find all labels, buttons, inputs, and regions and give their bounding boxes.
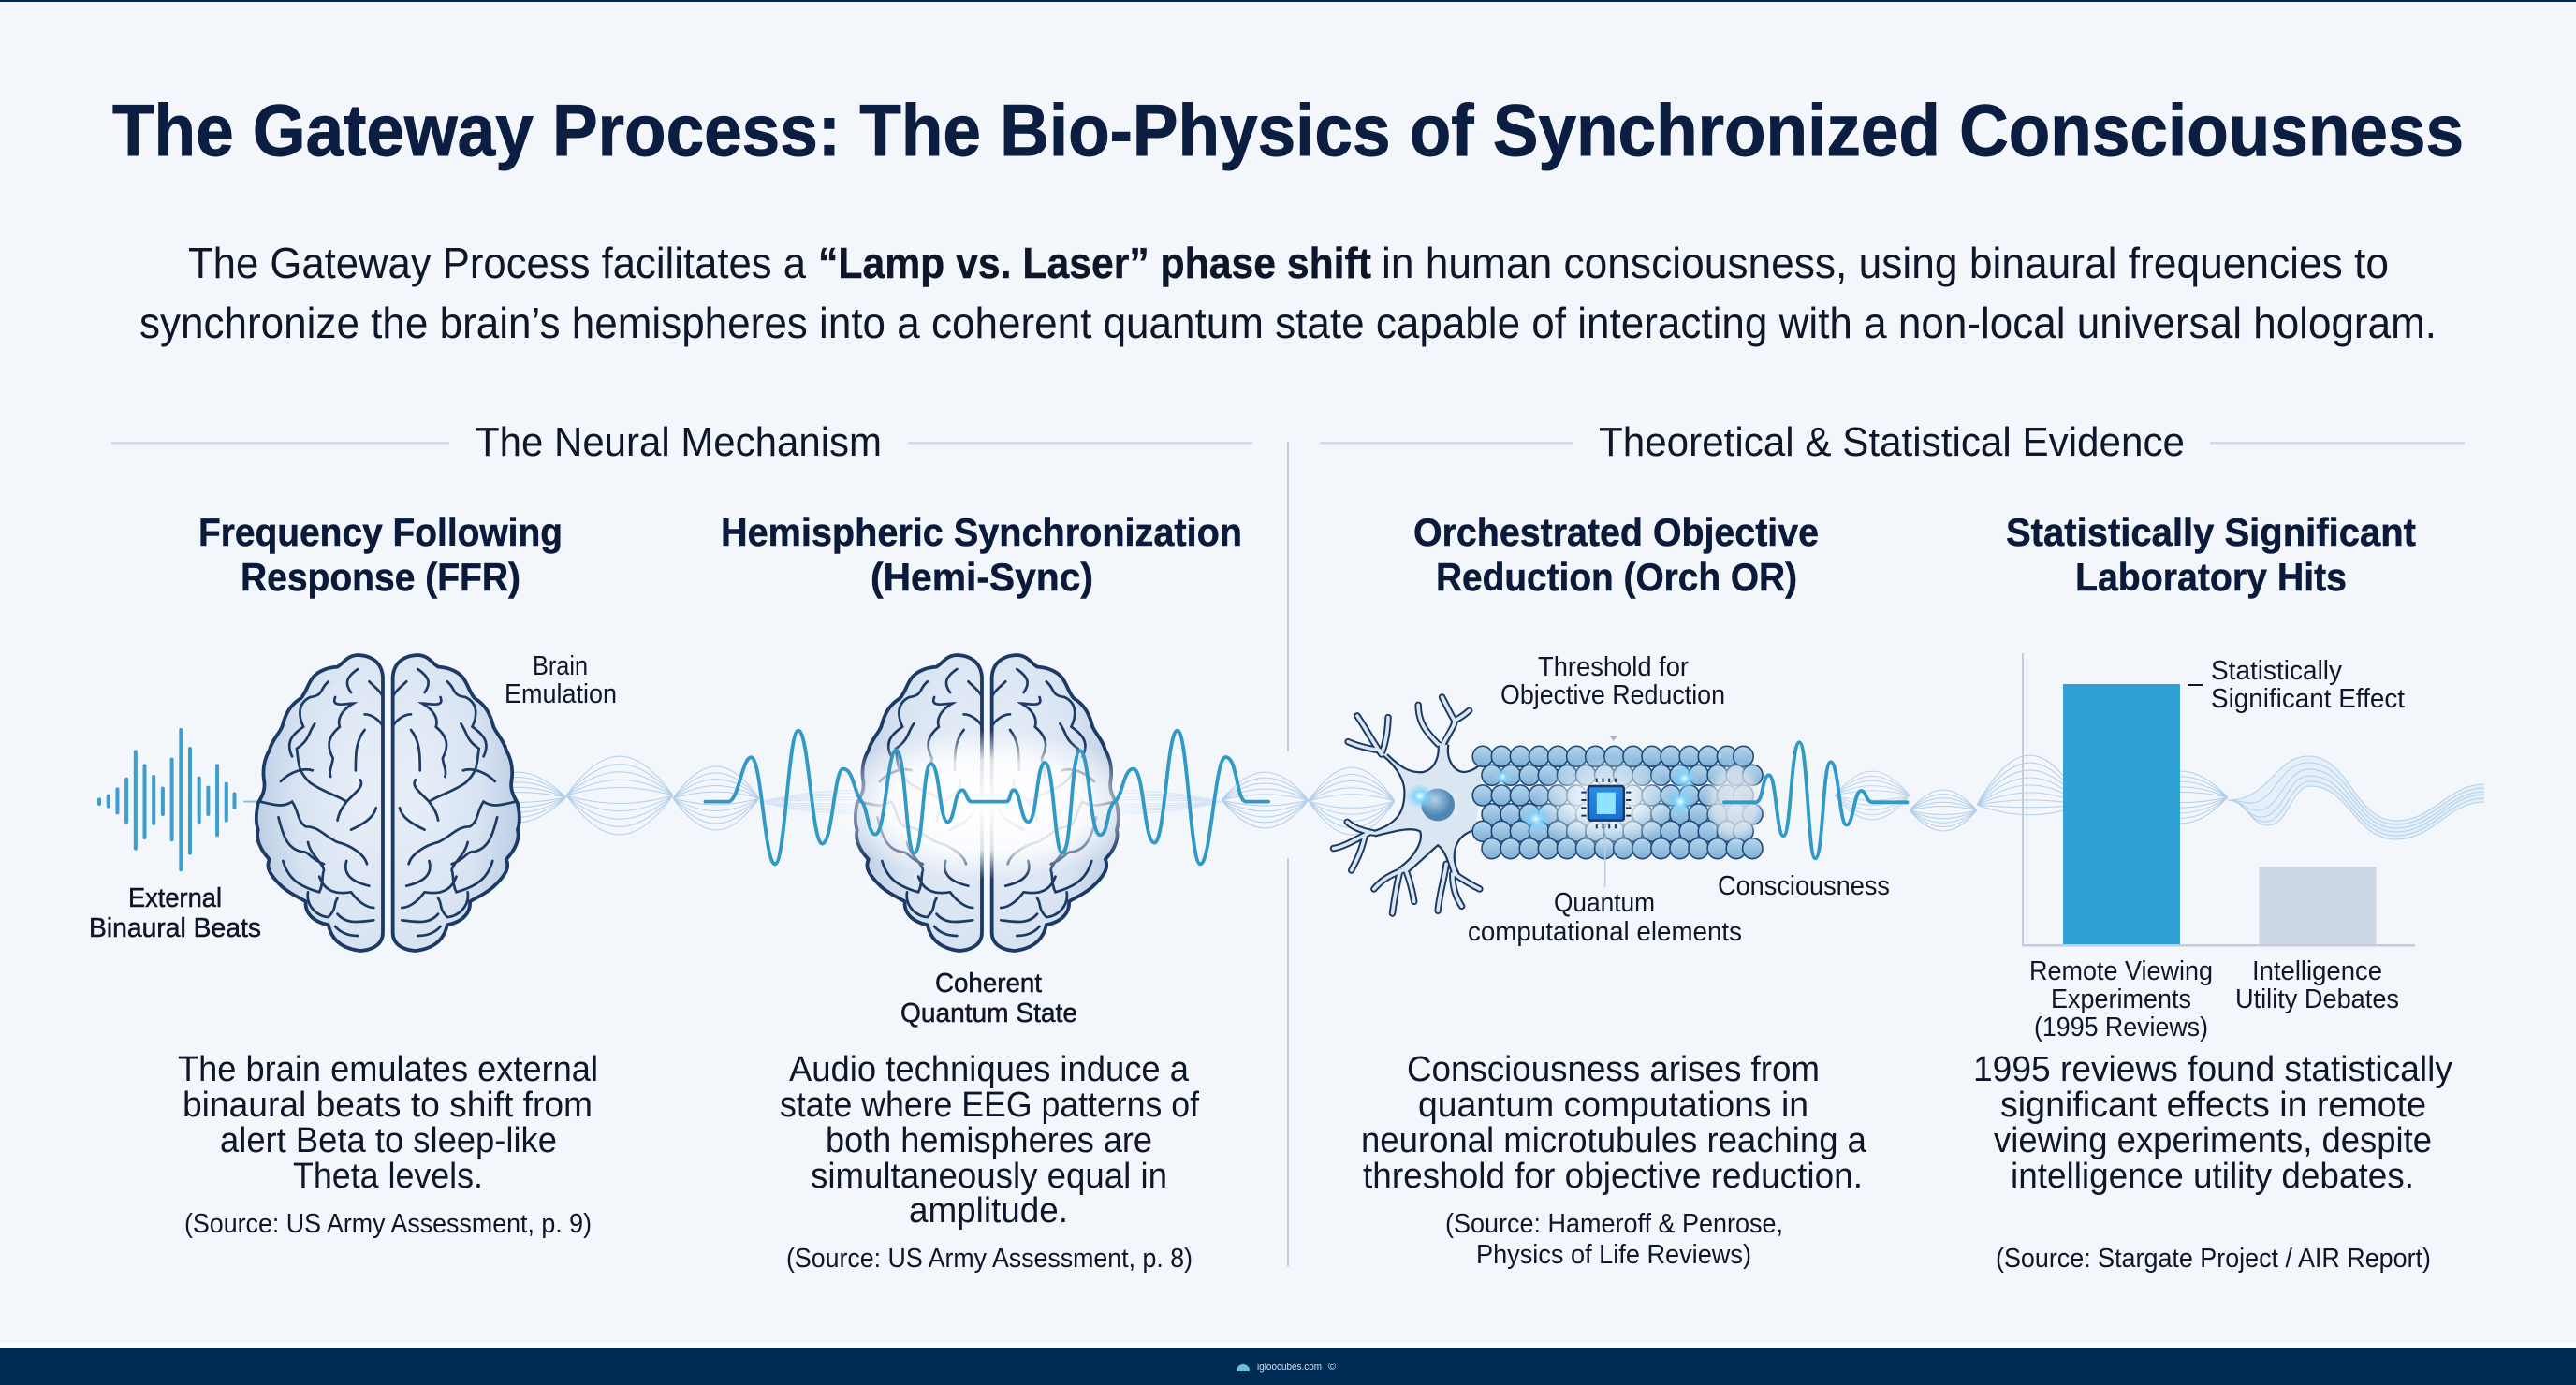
chart: synchronized brainwave bbox=[705, 731, 1268, 864]
callout: Statistically Significant Effect: Significant Effect bbox=[2211, 684, 2405, 714]
section heading: Theoretical and Statistical Evidence: Theoretical & Statistical Evidence bbox=[1599, 419, 2185, 465]
bar: Intelligence Utility Debates bbox=[2260, 867, 2376, 944]
section heading: The Neural Mechanism: The Neural Mechanism bbox=[476, 419, 882, 465]
footer credit: igloocubes.com bbox=[1257, 1362, 1322, 1373]
heading: Laboratory Hits: Laboratory Hits bbox=[2075, 555, 2347, 599]
label: Quantum computational elements: Quantum bbox=[1554, 888, 1655, 918]
panel: Statistically Significant Laboratory Hits bbox=[1973, 510, 2452, 1274]
heading: Hemi-Sync: Hemispheric Synchronization bbox=[721, 510, 1242, 554]
text block: Orch OR description: quantum computations in bbox=[1418, 1086, 1808, 1125]
bar chart bbox=[2022, 653, 2415, 947]
text block: Stargate description: viewing experiments, despite bbox=[1994, 1121, 2432, 1160]
axis label: Remote Viewing Experiments: Experiments bbox=[2051, 984, 2191, 1014]
intro paragraph: “Lamp vs. Laser” phase shift bbox=[818, 239, 1371, 287]
axis label: Remote Viewing Experiments bbox=[2029, 956, 2213, 1042]
heading: Hemi-Sync: (Hemi-Sync) bbox=[871, 555, 1093, 599]
label: Brain Emulation: Emulation bbox=[505, 679, 617, 709]
axis label: Intelligence Utility Debates: Intelligence bbox=[2252, 956, 2382, 986]
axis label: Intelligence Utility Debates: Utility Debates bbox=[2235, 984, 2399, 1014]
icon: brain bbox=[256, 655, 520, 951]
label: External Binaural Beats: External bbox=[128, 883, 222, 913]
label: Coherent Quantum State: Quantum State bbox=[900, 999, 1077, 1028]
intro paragraph: The Gateway Process facilitates a bbox=[188, 239, 806, 287]
callout: Statistically Significant Effect: Statistically bbox=[2211, 656, 2342, 686]
label: Threshold for Objective Reduction: Objective Reduction bbox=[1500, 680, 1725, 710]
label: External Binaural Beats: Binaural Beats bbox=[89, 913, 261, 943]
text block: Stargate description bbox=[1973, 1050, 2452, 1196]
heading: Laboratory Hits: Statistically Significant bbox=[2006, 510, 2416, 554]
label: External Binaural Beats bbox=[89, 883, 261, 943]
icon: igloo logo bbox=[1237, 1364, 1250, 1371]
icon: processor chip bbox=[1581, 779, 1631, 828]
heading: FFR: Frequency Following bbox=[198, 510, 563, 554]
icon: sound wave of binaural beats bbox=[99, 730, 283, 869]
label: Threshold for Objective Reduction: Threshold for bbox=[1538, 652, 1689, 682]
text block: Stargate description: intelligence utility debates. bbox=[2011, 1157, 2414, 1196]
text block: Hemi-Sync description: Audio techniques induce a bbox=[789, 1050, 1190, 1089]
panel: Frequency Following Response bbox=[89, 510, 617, 1239]
source: Hameroff and Penrose: Physics of Life Reviews) bbox=[1476, 1240, 1751, 1270]
icon: glowing brain bbox=[818, 655, 1155, 951]
flowing wave ribbon across the illustrations bbox=[468, 755, 2484, 839]
axis label: Remote Viewing Experiments: Remote Viewing bbox=[2029, 956, 2213, 986]
intro paragraph: in human consciousness, using binaural frequencies to bbox=[1382, 239, 2389, 287]
text block: FFR description: Theta levels. bbox=[293, 1157, 483, 1196]
source: Hameroff and Penrose: (Source: Hameroff & Penrose, bbox=[1445, 1209, 1783, 1239]
callout: Statistically Significant Effect bbox=[2188, 656, 2405, 714]
intro paragraph: synchronize the brain’s hemispheres into a coherent quantum state capable of interacting with a non-local universal hologram. bbox=[139, 299, 2437, 347]
text block: FFR description: alert Beta to sleep-like bbox=[220, 1121, 557, 1160]
axis label: Intelligence Utility Debates bbox=[2235, 956, 2399, 1014]
panel: Orchestrated Objective Reduction bbox=[1334, 510, 1907, 1270]
heading: Laboratory Hits bbox=[2006, 510, 2416, 599]
label: Quantum computational elements bbox=[1468, 888, 1742, 947]
heading: Orch OR bbox=[1413, 510, 1819, 599]
label: Coherent Quantum State: Coherent bbox=[935, 969, 1042, 999]
text block: FFR description bbox=[178, 1050, 598, 1196]
source: Stargate Project: (Source: Stargate Project / AIR Report) bbox=[1996, 1244, 2431, 1274]
label: Threshold for Objective Reduction bbox=[1500, 652, 1725, 710]
label: Brain Emulation: Brain bbox=[533, 651, 588, 681]
heading: FFR bbox=[198, 510, 563, 599]
text block: Hemi-Sync description: state where EEG patterns of bbox=[780, 1086, 1199, 1125]
text block: FFR description: The brain emulates external bbox=[178, 1050, 598, 1089]
text block: FFR description: binaural beats to shift from bbox=[183, 1086, 593, 1125]
heading: Orch OR: Orchestrated Objective bbox=[1413, 510, 1819, 554]
text block: Hemi-Sync description bbox=[780, 1050, 1199, 1231]
footer bar bbox=[0, 1343, 2576, 1385]
text block: Orch OR description: neuronal microtubules reaching a bbox=[1361, 1121, 1867, 1160]
source: US Army p. 8: (Source: US Army Assessment, p. 8) bbox=[786, 1244, 1193, 1274]
title: The Gateway Process: The Bio-Physics of Synchronized Consciousness bbox=[112, 89, 2464, 171]
copyright mark: © bbox=[1328, 1362, 1336, 1373]
intro paragraph bbox=[139, 239, 2437, 347]
text block: Orch OR description: Consciousness arises from bbox=[1407, 1050, 1820, 1089]
source: Hameroff and Penrose bbox=[1445, 1209, 1783, 1270]
label: Quantum computational elements: computational elements bbox=[1468, 917, 1742, 947]
top navy rule bbox=[0, 0, 2576, 2]
source: US Army p. 9: (Source: US Army Assessment, p. 9) bbox=[184, 1209, 592, 1239]
text block: Hemi-Sync description: amplitude. bbox=[909, 1191, 1068, 1231]
text block: Orch OR description bbox=[1361, 1050, 1867, 1196]
panel: Hemispheric Synchronization bbox=[705, 510, 1268, 1274]
label: Brain Emulation bbox=[505, 651, 617, 709]
icon: neuron bbox=[1334, 697, 1484, 913]
label: Coherent Quantum State bbox=[900, 969, 1077, 1028]
text block: Hemi-Sync description: simultaneously equal in bbox=[811, 1157, 1167, 1196]
text block: Stargate description: 1995 reviews found statistically bbox=[1973, 1050, 2452, 1089]
icon: microtubule with quantum chip bbox=[1472, 736, 1764, 887]
chart: consciousness wave bbox=[1724, 742, 1907, 858]
axis label: Remote Viewing Experiments: (1995 Reviews) bbox=[2034, 1013, 2208, 1042]
heading: Hemi-Sync bbox=[721, 510, 1242, 599]
bar: Remote Viewing Experiments bbox=[2063, 684, 2180, 944]
text block: Orch OR description: threshold for objective reduction. bbox=[1363, 1157, 1863, 1196]
text block: Stargate description: significant effects in remote bbox=[2000, 1086, 2426, 1125]
text block: Hemi-Sync description: both hemispheres are bbox=[826, 1121, 1152, 1160]
heading: FFR: Response (FFR) bbox=[241, 555, 520, 599]
heading: Orch OR: Reduction (Orch OR) bbox=[1436, 555, 1797, 599]
label: Consciousness: Consciousness bbox=[1718, 871, 1890, 901]
